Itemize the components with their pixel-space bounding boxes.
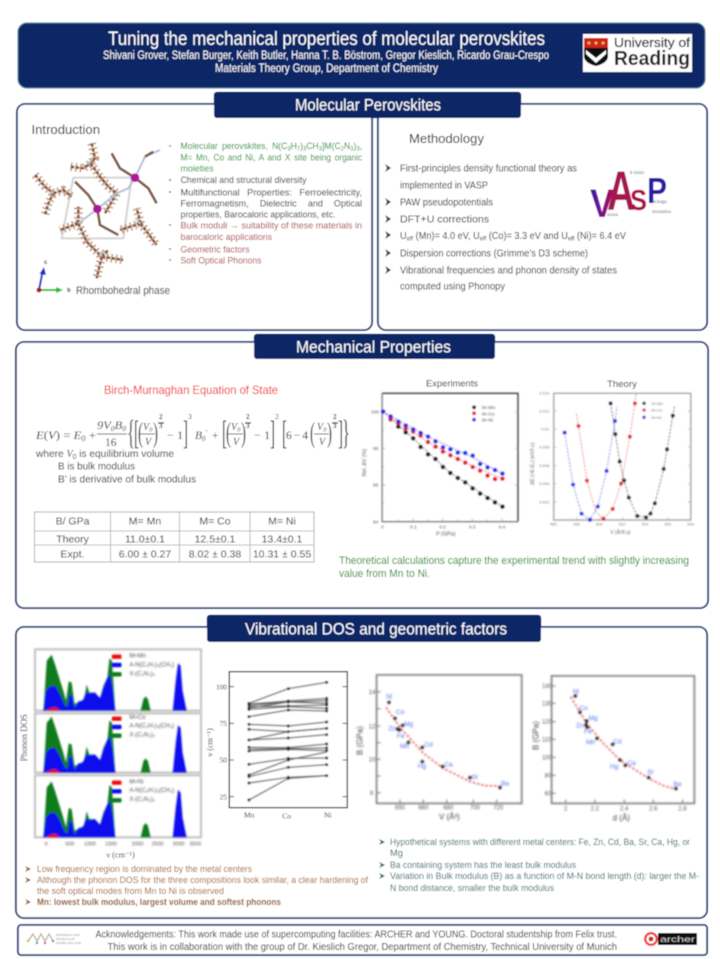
chart: bulk modulus vs bond length: 2.2 <box>591 807 600 813</box>
chart: mode frequencies Mn-Co-Ni: 75 <box>220 719 227 728</box>
logo: materials modelling hub: MATERIALS AND <box>56 933 81 937</box>
section heading tab: vibrational DOS <box>207 615 541 642</box>
DOS axis tick labels: 2000 <box>132 841 144 847</box>
equation: ( <box>226 418 231 449</box>
chart: theory: ΔE (=E-E₀) (eV/f.u) <box>530 442 536 485</box>
chart: bulk modulus vs volume: Mn <box>400 743 410 750</box>
methodology bullet list: eff <box>480 236 486 242</box>
methodology bullet list: U <box>400 231 407 242</box>
DOS axis tick labels: 3500 <box>189 841 201 847</box>
methodology bullet list: implemented in VASP <box>400 180 488 192</box>
methodology bullet list: eff <box>568 236 575 242</box>
equation: V <box>145 437 153 448</box>
logo: archer: archer <box>660 934 695 944</box>
chart: bulk modulus vs volume: 12 <box>369 724 376 730</box>
equation: V <box>233 437 241 448</box>
DOS x axis label: ν (cm⁻¹) <box>106 851 135 860</box>
table: bulk modulus: B/ GPa <box>56 516 90 528</box>
chart: bulk modulus vs bond length: 2.4 <box>620 807 629 813</box>
chart title: experiments: Experiments <box>426 378 478 390</box>
methodology bullet list: (Mn)= 4.0 eV, U <box>413 231 480 242</box>
chart: bulk modulus vs bond length: 2.8 <box>678 807 687 813</box>
panel: mechanical properties: } <box>342 413 350 452</box>
chart: mode frequencies Mn-Co-Ni: Co <box>282 811 291 820</box>
chart: theory: 490 <box>573 522 581 527</box>
crystal axes: b <box>67 288 71 294</box>
chart: mode frequencies Mn-Co-Ni: Ni <box>324 811 332 820</box>
chart: bulk modulus vs volume: Ba <box>501 780 509 787</box>
intro bullet list: ) <box>353 141 356 152</box>
phonon DOS: Ni: A-N(C₃H₇)₃(CH₃) <box>129 788 174 794</box>
intro bullet list: 3 <box>350 146 354 152</box>
phonon DOS: Ni: M=Ni <box>129 779 143 785</box>
equation: + <box>212 430 218 442</box>
intro bullet list: ]M(C <box>322 141 341 152</box>
geometric factors findings text: Hypothetical systems with different metal centers: Fe, Zn, Cd, Ba, Sr, Ca, Hg, or <box>390 837 690 847</box>
equation: 3 <box>159 422 163 430</box>
chart: bulk modulus vs volume: 700 <box>470 805 481 811</box>
chart: bulk modulus vs bond length: Ca <box>627 760 636 767</box>
phonon DOS: Mn: A-N(C₃H₇)₃(CH₃) <box>129 662 174 668</box>
chart: theory: 0.01 <box>541 427 550 432</box>
logo: VASP: b initio <box>630 171 645 176</box>
acknowledgement text <box>96 930 617 953</box>
chart: experiments: M=Co <box>482 411 495 416</box>
chart: bulk modulus vs volume: Ni <box>386 693 393 700</box>
equation: ] <box>183 415 188 452</box>
logo: VASP <box>590 159 672 226</box>
phonon DOS: Co: M=Co <box>129 715 146 721</box>
authors: Shivani Grover, Stefan Burger, Keith Butler, Hanna T. B. Böstrom, Gregor Kieslich, Ricardo Grau-Crespo <box>103 50 549 62</box>
intro bullet list: barocaloric applications <box>180 232 272 243</box>
equation: 0 <box>237 426 241 434</box>
chart: theory: 540 <box>687 522 695 527</box>
chart: theory: 0.012 <box>539 408 550 413</box>
phonon DOS: Mn: M=Mn <box>129 653 146 659</box>
chart: bulk modulus vs bond length: Mg <box>589 715 598 722</box>
chart: bulk modulus vs volume: 10 <box>369 758 376 764</box>
chart: bulk modulus vs bond length: 120 <box>542 720 553 726</box>
chart: theory: 0.014 <box>539 390 550 395</box>
chart: bulk modulus vs bond length: 140 <box>542 684 553 690</box>
header banner <box>18 23 705 88</box>
chart: experiments: P (GPa) <box>436 531 456 537</box>
equation: − 1 <box>254 430 270 442</box>
chart: bulk modulus vs volume: 720 <box>493 805 504 811</box>
finding text: value from Mn to Ni. <box>339 568 430 580</box>
chart: bulk modulus vs volume: B (GPa) <box>356 726 365 755</box>
chart: bulk modulus vs volume: 14 <box>369 690 376 696</box>
chart: bulk modulus vs bond length: Fe <box>584 728 592 735</box>
geometric factors findings text: Ba containing system has the least bulk modulus <box>390 860 576 870</box>
chart: bulk modulus vs volume: Mg <box>404 721 414 728</box>
intro bullet list: , <box>360 141 362 152</box>
chart: bulk modulus vs bond length: Ni <box>573 688 579 695</box>
chart: theory: 510 <box>619 522 626 527</box>
chart title: theory: Theory <box>607 379 637 390</box>
equation: 0 <box>81 434 86 443</box>
panel: mechanical properties <box>16 334 708 608</box>
intro bullet list: N <box>344 141 350 152</box>
equation definitions <box>35 448 196 486</box>
methodology bullet list: First-principles density functional theory as <box>400 164 577 174</box>
equation: − 1 <box>167 430 183 442</box>
chart: bulk modulus vs bond length: 130 <box>542 701 553 707</box>
equation: ) <box>153 418 158 449</box>
crystal structure image <box>35 143 160 278</box>
table: bulk modulus: 13.4±0.1 <box>262 534 303 546</box>
equation: 2 <box>246 413 250 421</box>
crystal phase label: Rhombohedral phase <box>76 285 170 297</box>
chart: theory: V (Å³/f.u) <box>610 529 631 536</box>
chart: experiments: 0.4 <box>499 525 506 530</box>
affiliation: Materials Theory Group, Department of Chemistry <box>215 63 438 75</box>
equation: 3 <box>188 412 192 421</box>
DOS axis tick labels: 2500 <box>152 841 164 847</box>
chart: bulk modulus vs bond length: 110 <box>542 737 552 743</box>
intro bullet list: CH <box>306 141 319 152</box>
chart: bulk modulus vs volume: Hg <box>418 763 426 770</box>
intro bullet list: 3 <box>303 146 307 152</box>
intro bullet list: Chemical and structural diversity <box>180 175 307 186</box>
logo: materials modelling hub: MODELLING HUB <box>56 941 81 945</box>
logo: University of Reading <box>583 34 692 72</box>
methodology bullet list: computed using Phonopy <box>400 282 505 292</box>
equation: + <box>86 428 96 442</box>
intro bullet list: M= Mn, Co and Ni, A and X site being organic <box>180 152 362 164</box>
equation: ) <box>241 418 246 449</box>
intro bullet list: 7 <box>297 146 301 152</box>
chart: bulk modulus vs bond length: Mn <box>586 739 596 746</box>
methodology bullet list <box>385 164 626 292</box>
chart: phonon DOS stacked panels <box>19 649 201 860</box>
panel: molecular perovskites <box>17 92 707 330</box>
methodology bullet list: PAW pseudopotentials <box>400 198 493 208</box>
intro bullet list: Multifunctional Properties: Ferroelectricity, <box>180 188 362 198</box>
equation: [ <box>282 415 287 452</box>
chart: bulk modulus vs bond length: B (GPa) <box>531 721 540 750</box>
equation definitions: B is bulk modulus <box>58 460 135 472</box>
methodology bullet list: (Ni)= 6.4 eV <box>574 231 626 242</box>
chart: theory: 530 <box>664 522 672 527</box>
heading: Birch-Murnaghan equation of state: Birch-Murnaghan Equation of State <box>104 383 278 397</box>
equation: 16 <box>105 437 117 449</box>
methodology bullet list: Dispersion corrections (Grimme’s D3 scheme) <box>400 248 588 260</box>
panel: methodology <box>378 104 707 330</box>
heading: introduction: Introduction <box>32 123 100 137</box>
chart: bulk modulus vs volume: Co <box>396 709 405 716</box>
intro bullet list: Geometric factors <box>180 244 250 256</box>
table: bulk modulus: Expt. <box>61 548 84 560</box>
equation: B <box>115 420 122 432</box>
equation: [ <box>222 415 227 452</box>
chart: experiments: 0.3 <box>469 525 476 530</box>
chart: bulk modulus vs volume <box>356 675 522 821</box>
equation: 9V <box>97 420 110 432</box>
chart: experiments: M=Ni <box>482 417 493 422</box>
equation: [ <box>134 415 139 452</box>
intro bullet list: H <box>291 141 297 152</box>
DOS axis tick labels: 1500 <box>105 841 117 847</box>
equation: 0 <box>202 435 206 443</box>
chart: theory: 520 <box>642 522 649 527</box>
phonon DOS: Ni: X-(C₂N₃)₃ <box>129 797 156 803</box>
phonon DOS: Ni <box>35 775 201 837</box>
DOS y axis label: Phonon DOS <box>19 714 29 761</box>
equation definitions: B’ is derivative of bulk modulus <box>58 474 196 486</box>
table: bulk modulus: 11.0±0.1 <box>125 534 165 546</box>
chart: bulk modulus vs volume: 660 <box>418 805 429 811</box>
equation: { <box>127 413 135 452</box>
DOS axis tick labels: 0 <box>45 841 48 847</box>
DOS findings text: Although the phonon DOS for the three compositions look similar, a clear hardening of <box>37 875 368 885</box>
intro bullet list: properties, Barocaloric applications, etc. <box>180 210 336 220</box>
chart: experiments: 94 <box>373 519 379 524</box>
DOS findings text: Mn: lowest bulk modulus, largest volume and softest phonons <box>37 897 281 907</box>
panel: vibrational DOS and geometric factors <box>16 615 707 918</box>
equation definitions: 0 <box>73 454 77 461</box>
equation: 0 <box>122 425 127 433</box>
logo: VASP: imulation <box>652 210 672 215</box>
DOS findings text: Low frequency region is dominated by the metal centers <box>37 864 252 874</box>
chart: bulk modulus vs volume: Ca <box>444 761 453 768</box>
chart: theory: 0.006 <box>539 463 550 468</box>
chart: bulk modulus vs bond length: 2.6 <box>649 807 658 813</box>
chart: mode frequencies Mn-Co-Ni <box>206 672 347 820</box>
equation: 3 <box>246 422 250 430</box>
chart: experiments: Rel. ΔV (%) <box>362 449 368 477</box>
chart: theory: 500 <box>596 522 604 527</box>
equation: ( <box>310 418 315 449</box>
table: bulk modulus: 10.31 ± 0.55 <box>253 548 311 560</box>
intro bullet list: ) <box>300 141 303 152</box>
equation: V <box>319 437 327 448</box>
intro bullet list: moieties <box>180 164 214 174</box>
heading: methodology: Methodology <box>409 132 485 146</box>
panel: introduction <box>17 104 372 330</box>
chart: experiments <box>362 378 518 537</box>
DOS findings text <box>25 864 368 907</box>
logo: VASP: V <box>590 182 614 226</box>
chart: bulk modulus vs bond length: Cd <box>613 738 622 745</box>
chart: experiments: 98 <box>373 446 379 451</box>
intro bullet list: Ferromagnetism, Dielectric and Optical <box>180 198 362 210</box>
intro bullet list: 3 <box>356 146 360 152</box>
chart: mode frequencies Mn-Co-Ni: 25 <box>220 792 227 801</box>
equation: ( <box>138 418 143 449</box>
table: bulk modulus: 8.02 ± 0.38 <box>189 548 241 560</box>
acknowledgement text: This work is in collaboration with the group of Dr. Kieslich Gregor, Department of Chemistry, Technical University of Munich <box>108 942 617 953</box>
DOS axis tick labels: 500 <box>65 841 74 847</box>
equation definitions: where V <box>36 448 73 460</box>
table: bulk modulus: 6.00 ± 0.27 <box>119 548 171 560</box>
methodology bullet list: (Co)= 3.3 eV and U <box>486 231 568 242</box>
equation: V <box>143 422 149 433</box>
equation: 2 <box>159 413 163 421</box>
section heading tab: vibrational DOS: Vibrational DOS and geometric factors <box>245 620 507 638</box>
intro bullet list: Soft Optical Phonons <box>180 256 262 266</box>
chart: theory: M=Ni <box>651 415 661 420</box>
chart: mode frequencies Mn-Co-Ni: 50 <box>220 756 227 765</box>
chart: bulk modulus vs bond length: Co <box>579 705 588 712</box>
chart: bulk modulus vs volume: 6 <box>370 791 374 797</box>
DOS axis tick labels: 3000 <box>173 841 185 847</box>
acknowledgements box <box>18 925 707 955</box>
section heading tab: mechanical properties: Mechanical Properties <box>296 338 451 356</box>
chart: bulk modulus vs volume: 650 <box>395 805 406 811</box>
logo: materials modelling hub: MOLECULAR <box>56 937 76 941</box>
chart: bulk modulus vs volume: Fe <box>397 733 405 740</box>
equation definitions: is equilibrium volume <box>76 448 174 460</box>
section heading tab: molecular perovskites <box>214 92 521 118</box>
methodology bullet list: DFT+U corrections <box>400 214 489 226</box>
intro bullet list: Molecular perovskites, N(C <box>180 141 299 152</box>
phonon DOS: Mn: X-(C₂N₃)₃ <box>129 671 156 677</box>
geometric factors findings text <box>379 837 699 893</box>
crystal axes: c <box>44 260 48 266</box>
chart: mode frequencies Mn-Co-Ni: Mn <box>244 810 255 819</box>
chart: bulk modulus vs bond length: 2 <box>564 807 568 813</box>
chart: theory: 0.008 <box>539 445 550 450</box>
intro bullet list: 3 <box>319 146 322 152</box>
logo: VASP: P <box>647 170 667 211</box>
chart: bulk modulus vs bond length: 60 <box>545 791 552 797</box>
methodology bullet list: eff <box>407 236 413 242</box>
chart: bulk modulus vs bond length: 80 <box>545 773 552 779</box>
chart: theory: 580 <box>550 522 558 527</box>
DOS axis tick labels <box>45 841 201 847</box>
crystal axes <box>36 260 71 294</box>
chart: theory: 0.002 <box>539 499 550 504</box>
logo: VASP: A <box>607 159 635 222</box>
intro bullet list <box>169 141 362 266</box>
logo: University of Reading: Reading <box>614 48 690 70</box>
intro bullet list: Bulk moduli → suitability of these materials in <box>180 220 362 232</box>
chart: bulk modulus vs bond length: Sr <box>647 769 655 776</box>
equation: V <box>317 422 323 433</box>
logo: University of Reading: University of <box>614 36 691 50</box>
equation: 2 <box>333 413 337 421</box>
table: bulk modulus <box>34 512 314 562</box>
section heading tab: molecular perovskites: Molecular Perovskites <box>295 96 441 114</box>
logo: materials modelling hub <box>27 933 81 945</box>
phonon DOS: Mn <box>35 649 201 711</box>
equation <box>35 412 350 452</box>
table: bulk modulus: M= Mn <box>129 516 161 528</box>
chart: experiments: M=Mn <box>482 405 495 410</box>
chart: experiments: 96 <box>373 483 379 488</box>
chart: bulk modulus vs bond length: Ba <box>673 781 682 788</box>
section heading tab: mechanical properties <box>254 334 495 359</box>
chart: bulk modulus vs bond length: 100 <box>542 755 553 761</box>
chart: bulk modulus vs bond length: Zn <box>576 722 584 729</box>
equation: 0 <box>323 426 327 434</box>
chart: mode frequencies Mn-Co-Ni: 100 <box>216 682 227 691</box>
equation: 0 <box>111 425 115 433</box>
table: bulk modulus: M= Ni <box>268 516 296 528</box>
equation: ) <box>327 418 332 449</box>
intro bullet list: 2 <box>341 146 344 152</box>
chart: bulk modulus vs bond length: Hg <box>610 763 619 770</box>
DOS axis tick labels: 1000 <box>84 841 96 847</box>
chart: bulk modulus vs bond length <box>531 676 694 823</box>
intro bullet list: 3 <box>287 146 291 152</box>
chart: theory <box>530 379 695 536</box>
chart: theory: 0.004 <box>539 481 550 486</box>
chart: bulk modulus vs bond length: d (Å) <box>613 814 630 823</box>
chart: bulk modulus vs volume: V (Å³) <box>439 812 460 821</box>
chart: experiments: 0.1 <box>410 525 417 530</box>
chart: bulk modulus vs volume: Zn <box>388 726 396 733</box>
chart: theory: M=Co <box>651 408 663 413</box>
geometric factors findings text: N bond distance, smaller the bulk modulus <box>390 883 554 893</box>
chart: bulk modulus vs volume: 680 <box>443 805 454 811</box>
equation: E(V) = E <box>36 428 81 442</box>
equation: 3 <box>333 422 337 430</box>
title: Tuning the mechanical properties of molecular perovskites <box>108 29 545 50</box>
table: bulk modulus: Theory <box>56 534 90 546</box>
acknowledgement text: Acknowledgements: This work made use of supercomputing facilities: ARCHER and YOUNG. Doctoral studentship from Felix trust. <box>96 930 617 940</box>
phonon DOS: Co <box>35 713 201 773</box>
chart: bulk modulus vs volume: Sr <box>472 774 479 781</box>
geometric factors findings text: Mg <box>390 848 403 858</box>
finding text: Theoretical calculations capture the experimental trend with slightly increasing <box>339 555 689 567</box>
logo: VASP: ackage <box>653 200 668 205</box>
logo: VASP: S <box>630 185 647 217</box>
table: bulk modulus: 12.5±0.1 <box>195 534 236 546</box>
chart: experiments: 100 <box>371 409 379 414</box>
DOS findings text: the soft optical modes from Mn to Ni is observed <box>37 886 224 896</box>
equation: B <box>195 430 202 442</box>
geometric factors findings text: Variation in Bulk modulus (B) as a function of M-N bond length (d): larger the M- <box>390 871 699 881</box>
chart: experiments: 0 <box>381 525 384 530</box>
logo: VASP: ienna <box>607 213 619 218</box>
equation: ] <box>338 415 343 452</box>
equation: 0 <box>149 426 153 434</box>
logo: archer <box>644 932 697 946</box>
chart: bulk modulus vs volume: Cd <box>424 742 433 749</box>
equation: ] <box>270 415 275 452</box>
phonon DOS: Co: A-N(C₃H₇)₃(CH₃) <box>129 724 174 730</box>
methodology bullet list: Vibrational frequencies and phonon density of states <box>400 266 617 276</box>
equation: 6 − 4 <box>286 430 308 442</box>
phonon DOS: Co: X-(C₂N₃)₃ <box>129 733 156 739</box>
chart: experiments: 0.2 <box>439 525 446 530</box>
finding text <box>339 555 689 580</box>
chart: theory: M=Mn <box>651 401 663 406</box>
table: bulk modulus: M= Co <box>199 516 231 528</box>
equation: V <box>231 422 237 433</box>
equation: 2 <box>275 412 279 421</box>
chart: mode frequencies Mn-Co-Ni: ν (cm⁻¹) <box>206 728 215 757</box>
equation: ′ <box>206 429 208 437</box>
